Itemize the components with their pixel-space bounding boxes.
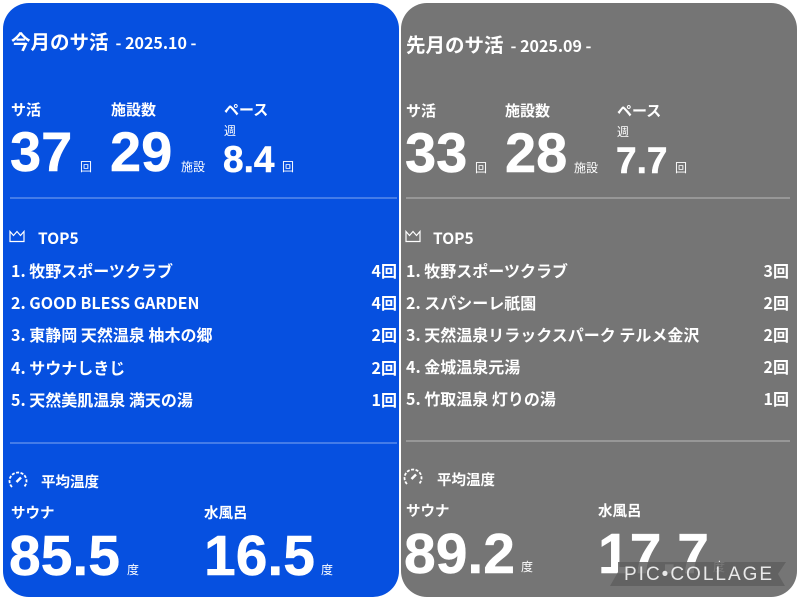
label: facilities: 施設数 bbox=[111, 99, 156, 120]
value: facility count: 28 bbox=[505, 121, 567, 184]
heading: average temperature: 平均温度 bbox=[437, 469, 495, 490]
heading: top 5: TOP5 bbox=[433, 227, 474, 249]
heading: this month: 今月のサ活 - 2025.10 - bbox=[11, 26, 196, 55]
value: cold bath temperature: 17.7 bbox=[598, 522, 709, 586]
unit: degrees cold bath: 度 bbox=[713, 558, 725, 575]
label: sakatsu: サ活 bbox=[406, 100, 436, 121]
panel: this month bbox=[3, 3, 399, 597]
rank 4 count: 2回 bbox=[764, 354, 789, 378]
value: cold bath temperature: 16.5 bbox=[204, 524, 315, 588]
rank 3 count: 2回 bbox=[764, 322, 789, 346]
unit: times per week: 回 bbox=[675, 159, 687, 176]
rank 5 name: 5. 竹取温泉 灯りの湯 bbox=[406, 386, 556, 410]
value: sakatsu count: 37 bbox=[10, 120, 72, 183]
unit: facilities: 施設 bbox=[181, 158, 205, 175]
icon: gauge bbox=[8, 472, 28, 488]
rank 4 name: 4. 金城温泉元湯 bbox=[406, 354, 520, 378]
rank 5 count: 1回 bbox=[372, 387, 397, 411]
icon: crown bbox=[405, 230, 421, 242]
heading: average temperature: 平均温度 bbox=[41, 471, 99, 492]
unit: degrees sauna: 度 bbox=[127, 561, 139, 578]
panel: last month bbox=[401, 3, 797, 597]
watermark text: PIC•COLLAGE bbox=[624, 564, 774, 585]
label: pace: ペース bbox=[617, 100, 661, 121]
icon: gauge bbox=[404, 468, 422, 484]
label: facilities: 施設数 bbox=[505, 100, 550, 121]
rank 1 count: 3回 bbox=[764, 258, 789, 282]
rank 2 name: 2. GOOD BLESS GARDEN bbox=[11, 290, 199, 314]
icon: crown bbox=[9, 230, 25, 242]
value: pace: 8.4 bbox=[223, 139, 274, 180]
unit: degrees cold bath: 度 bbox=[321, 561, 333, 578]
unit: times: 回 bbox=[475, 159, 487, 176]
unit: facilities: 施設 bbox=[574, 159, 598, 176]
rank 3 name: 3. 天然温泉リラックスパーク テルメ金沢 bbox=[406, 322, 699, 346]
value: sakatsu count: 33 bbox=[405, 121, 467, 184]
label: sauna: サウナ bbox=[406, 500, 450, 521]
ranking list bbox=[11, 258, 397, 411]
rank 2 count: 4回 bbox=[372, 290, 397, 314]
rank 2 count: 2回 bbox=[764, 290, 789, 314]
rank 3 name: 3. 東静岡 天然温泉 柚木の郷 bbox=[11, 322, 213, 346]
rank 4 name: 4. サウナしきじ bbox=[11, 355, 125, 379]
value: facility count: 29 bbox=[110, 120, 172, 183]
unit: degrees sauna: 度 bbox=[521, 558, 533, 575]
label: pace: ペース bbox=[224, 99, 268, 120]
value: sauna temperature: 89.2 bbox=[404, 522, 515, 586]
rank 2 name: 2. スパシーレ祇園 bbox=[406, 290, 536, 314]
heading: top 5: TOP5 bbox=[38, 227, 79, 249]
value: sauna temperature: 85.5 bbox=[9, 524, 120, 588]
heading: last month: 先月のサ活 - 2025.09 - bbox=[406, 29, 591, 58]
ranking list bbox=[406, 258, 789, 410]
label: weekly: 週 bbox=[617, 123, 629, 140]
rank 1 name: 1. 牧野スポーツクラブ bbox=[406, 258, 568, 282]
rank 1 count: 4回 bbox=[372, 258, 397, 282]
value: pace: 7.7 bbox=[616, 140, 667, 181]
unit: times: 回 bbox=[80, 158, 92, 175]
unit: times per week: 回 bbox=[282, 158, 294, 175]
watermark: PIC COLLAGE ribbon bbox=[610, 562, 786, 586]
label: weekly: 週 bbox=[224, 122, 236, 139]
rank 5 count: 1回 bbox=[764, 386, 789, 410]
label: sakatsu: サ活 bbox=[11, 99, 41, 120]
rank 4 count: 2回 bbox=[372, 355, 397, 379]
rank 3 count: 2回 bbox=[372, 322, 397, 346]
rank 5 name: 5. 天然美肌温泉 満天の湯 bbox=[11, 387, 193, 411]
rank 1 name: 1. 牧野スポーツクラブ bbox=[11, 258, 173, 282]
label: sauna: サウナ bbox=[11, 502, 54, 523]
label: cold bath: 水風呂 bbox=[598, 500, 642, 521]
label: cold bath: 水風呂 bbox=[204, 502, 248, 523]
ribbon shape bbox=[610, 562, 786, 586]
